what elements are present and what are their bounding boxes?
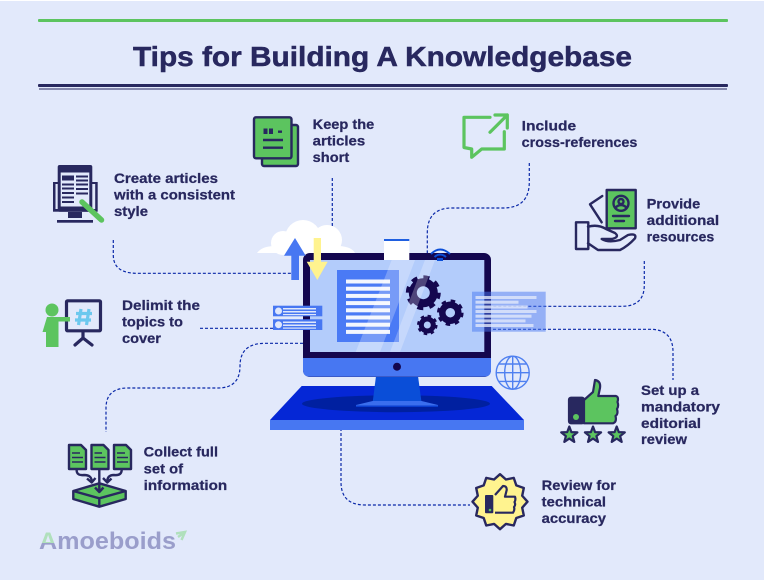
icon: thumbs up with stars xyxy=(561,380,625,442)
label xyxy=(144,444,227,493)
tip: review for technical accuracy xyxy=(472,474,617,529)
label: Include xyxy=(522,118,576,134)
label: mandatory xyxy=(641,399,720,415)
label: with a consistent xyxy=(113,187,235,203)
label: cross-references xyxy=(522,134,638,150)
tip: delimit the topics xyxy=(42,297,200,347)
label: Review for xyxy=(542,477,617,493)
label: technical xyxy=(542,494,606,510)
label: Create articles xyxy=(114,170,218,186)
label: Set up a xyxy=(641,382,699,398)
download arrow xyxy=(307,238,328,280)
label xyxy=(542,477,617,526)
label: editorial xyxy=(641,415,701,431)
label: topics to xyxy=(122,314,183,330)
label: additional xyxy=(647,212,719,228)
tip: create articles xyxy=(53,165,235,223)
icon: article on device xyxy=(53,165,102,223)
header: title and rules xyxy=(38,19,728,90)
browser window xyxy=(384,239,409,260)
cloud xyxy=(257,220,355,256)
screen reflections xyxy=(356,260,435,352)
icon: badge with thumbs up xyxy=(472,474,528,529)
label: Provide xyxy=(647,196,700,212)
monitor xyxy=(303,253,491,377)
upload arrow xyxy=(284,238,306,280)
tip: keep the articles short xyxy=(254,116,374,166)
icon: speech bubble with arrow xyxy=(464,115,507,157)
desk xyxy=(270,386,524,430)
label: Delimit the xyxy=(122,297,200,313)
label xyxy=(641,382,720,447)
icon: stacked pages xyxy=(254,117,298,166)
dashed connector lines xyxy=(106,163,673,505)
label: set of xyxy=(144,460,183,476)
label: information xyxy=(144,477,227,493)
monitor stand xyxy=(356,376,438,407)
label xyxy=(313,116,374,165)
tip: provide additional resources xyxy=(576,190,719,250)
label: accuracy xyxy=(542,510,606,526)
notification bars xyxy=(273,306,322,330)
wifi icon xyxy=(431,250,450,261)
logo: Amoeboids: Amoeboids xyxy=(39,528,176,555)
title: Tips for Building A Knowledgebase xyxy=(133,41,632,72)
label: short xyxy=(313,149,350,165)
label: cover xyxy=(122,330,162,346)
label xyxy=(113,170,235,219)
gears xyxy=(408,277,462,334)
label: Keep the xyxy=(313,116,374,132)
label: Collect full xyxy=(144,444,218,460)
central illustration: computer xyxy=(257,220,546,430)
label: style xyxy=(114,203,148,219)
label xyxy=(122,297,200,346)
tip: include cross-references xyxy=(464,115,638,157)
globe icon xyxy=(496,356,529,389)
label: review xyxy=(641,431,687,447)
icon: hand holding card xyxy=(576,190,636,250)
label: resources xyxy=(647,229,714,245)
document on screen xyxy=(337,270,399,342)
label xyxy=(522,118,638,150)
icon: presenter with board xyxy=(42,301,100,347)
tip: collect full set of information xyxy=(69,444,227,507)
tip: mandatory editorial review xyxy=(561,380,720,447)
label: articles xyxy=(313,133,365,149)
icon: documents into box xyxy=(69,445,131,507)
label xyxy=(647,196,719,245)
floating text panel xyxy=(472,292,546,332)
